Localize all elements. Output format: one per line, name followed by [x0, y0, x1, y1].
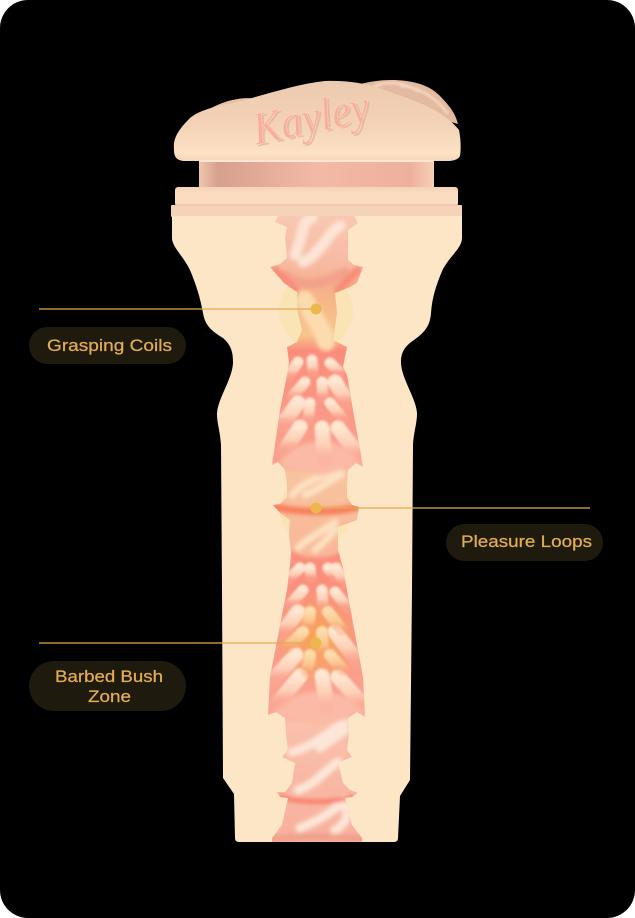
- nubs: warm centre: [288, 612, 343, 672]
- marker dot: [310, 304, 322, 314]
- label text: Barbed Bush: [55, 667, 163, 686]
- callout: Pleasure Loops: [310, 502, 603, 561]
- neck: [199, 160, 434, 188]
- flange lower: [171, 205, 462, 217]
- logo script: Kayley: [247, 80, 374, 155]
- halo: coils: [279, 274, 353, 348]
- body: [172, 216, 462, 842]
- cap: [174, 81, 461, 161]
- leader line: [316, 507, 590, 509]
- leader line: [39, 642, 316, 644]
- product illustration: [171, 80, 462, 842]
- neck highlight: [199, 160, 434, 162]
- marker dot: [310, 638, 322, 648]
- leader line: [39, 308, 316, 310]
- canal: [268, 216, 365, 842]
- nubs: [273, 360, 365, 707]
- logo shadow: Kayley: [249, 82, 376, 156]
- halo: loops: [280, 475, 352, 545]
- cap bumps: [205, 80, 458, 124]
- label pill: [29, 327, 186, 364]
- label text: Zone: [88, 687, 131, 706]
- label text: Pleasure Loops: [461, 532, 592, 551]
- flange line: [175, 204, 458, 206]
- label pill: [446, 524, 603, 561]
- callout: Barbed Bush Zone: [29, 638, 322, 711]
- label pill: [29, 661, 186, 711]
- marker dot: [310, 502, 322, 514]
- twists: [272, 218, 362, 839]
- glow: barbed zone: [280, 598, 356, 682]
- callout: Grasping Coils: [29, 304, 322, 364]
- flange upper: [175, 187, 458, 206]
- label text: Grasping Coils: [47, 336, 172, 355]
